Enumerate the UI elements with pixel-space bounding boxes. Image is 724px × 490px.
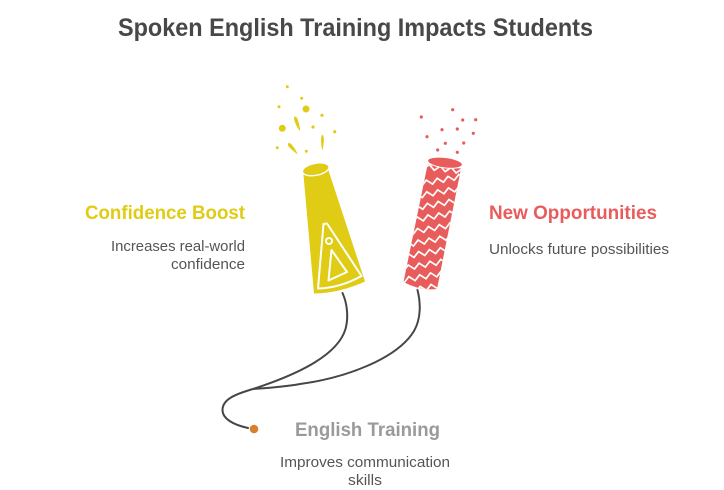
firecracker body (404, 165, 461, 289)
connector lines: fuses (222, 290, 420, 428)
text: training description: skills (348, 473, 382, 489)
yellow cone firework (301, 161, 365, 294)
inner triangle (328, 250, 347, 280)
triangle outline (318, 224, 362, 288)
heading: English Training: English Training (295, 420, 440, 441)
title: Spoken English Training Impacts Students (118, 14, 593, 42)
text: confidence description: confidence (171, 257, 245, 273)
cone rim (301, 161, 330, 178)
text: opportunities description: Unlocks future possibilities (489, 242, 669, 258)
icon: start dot (250, 425, 258, 433)
firecracker rim (427, 155, 463, 170)
heading: New Opportunities: New Opportunities (489, 203, 657, 224)
yellow confetti (276, 85, 336, 154)
text: confidence description (111, 239, 245, 273)
heading: Confidence Boost: Confidence Boost (85, 203, 246, 224)
red sparks (420, 108, 477, 154)
cone body (304, 168, 365, 294)
text: training description: Improves communication (280, 455, 450, 471)
red firecracker (404, 158, 462, 290)
zigzag stripes (404, 165, 461, 290)
text: confidence description: Increases real-world (111, 239, 245, 255)
text: training description (280, 455, 450, 489)
triangle circle (326, 238, 332, 244)
